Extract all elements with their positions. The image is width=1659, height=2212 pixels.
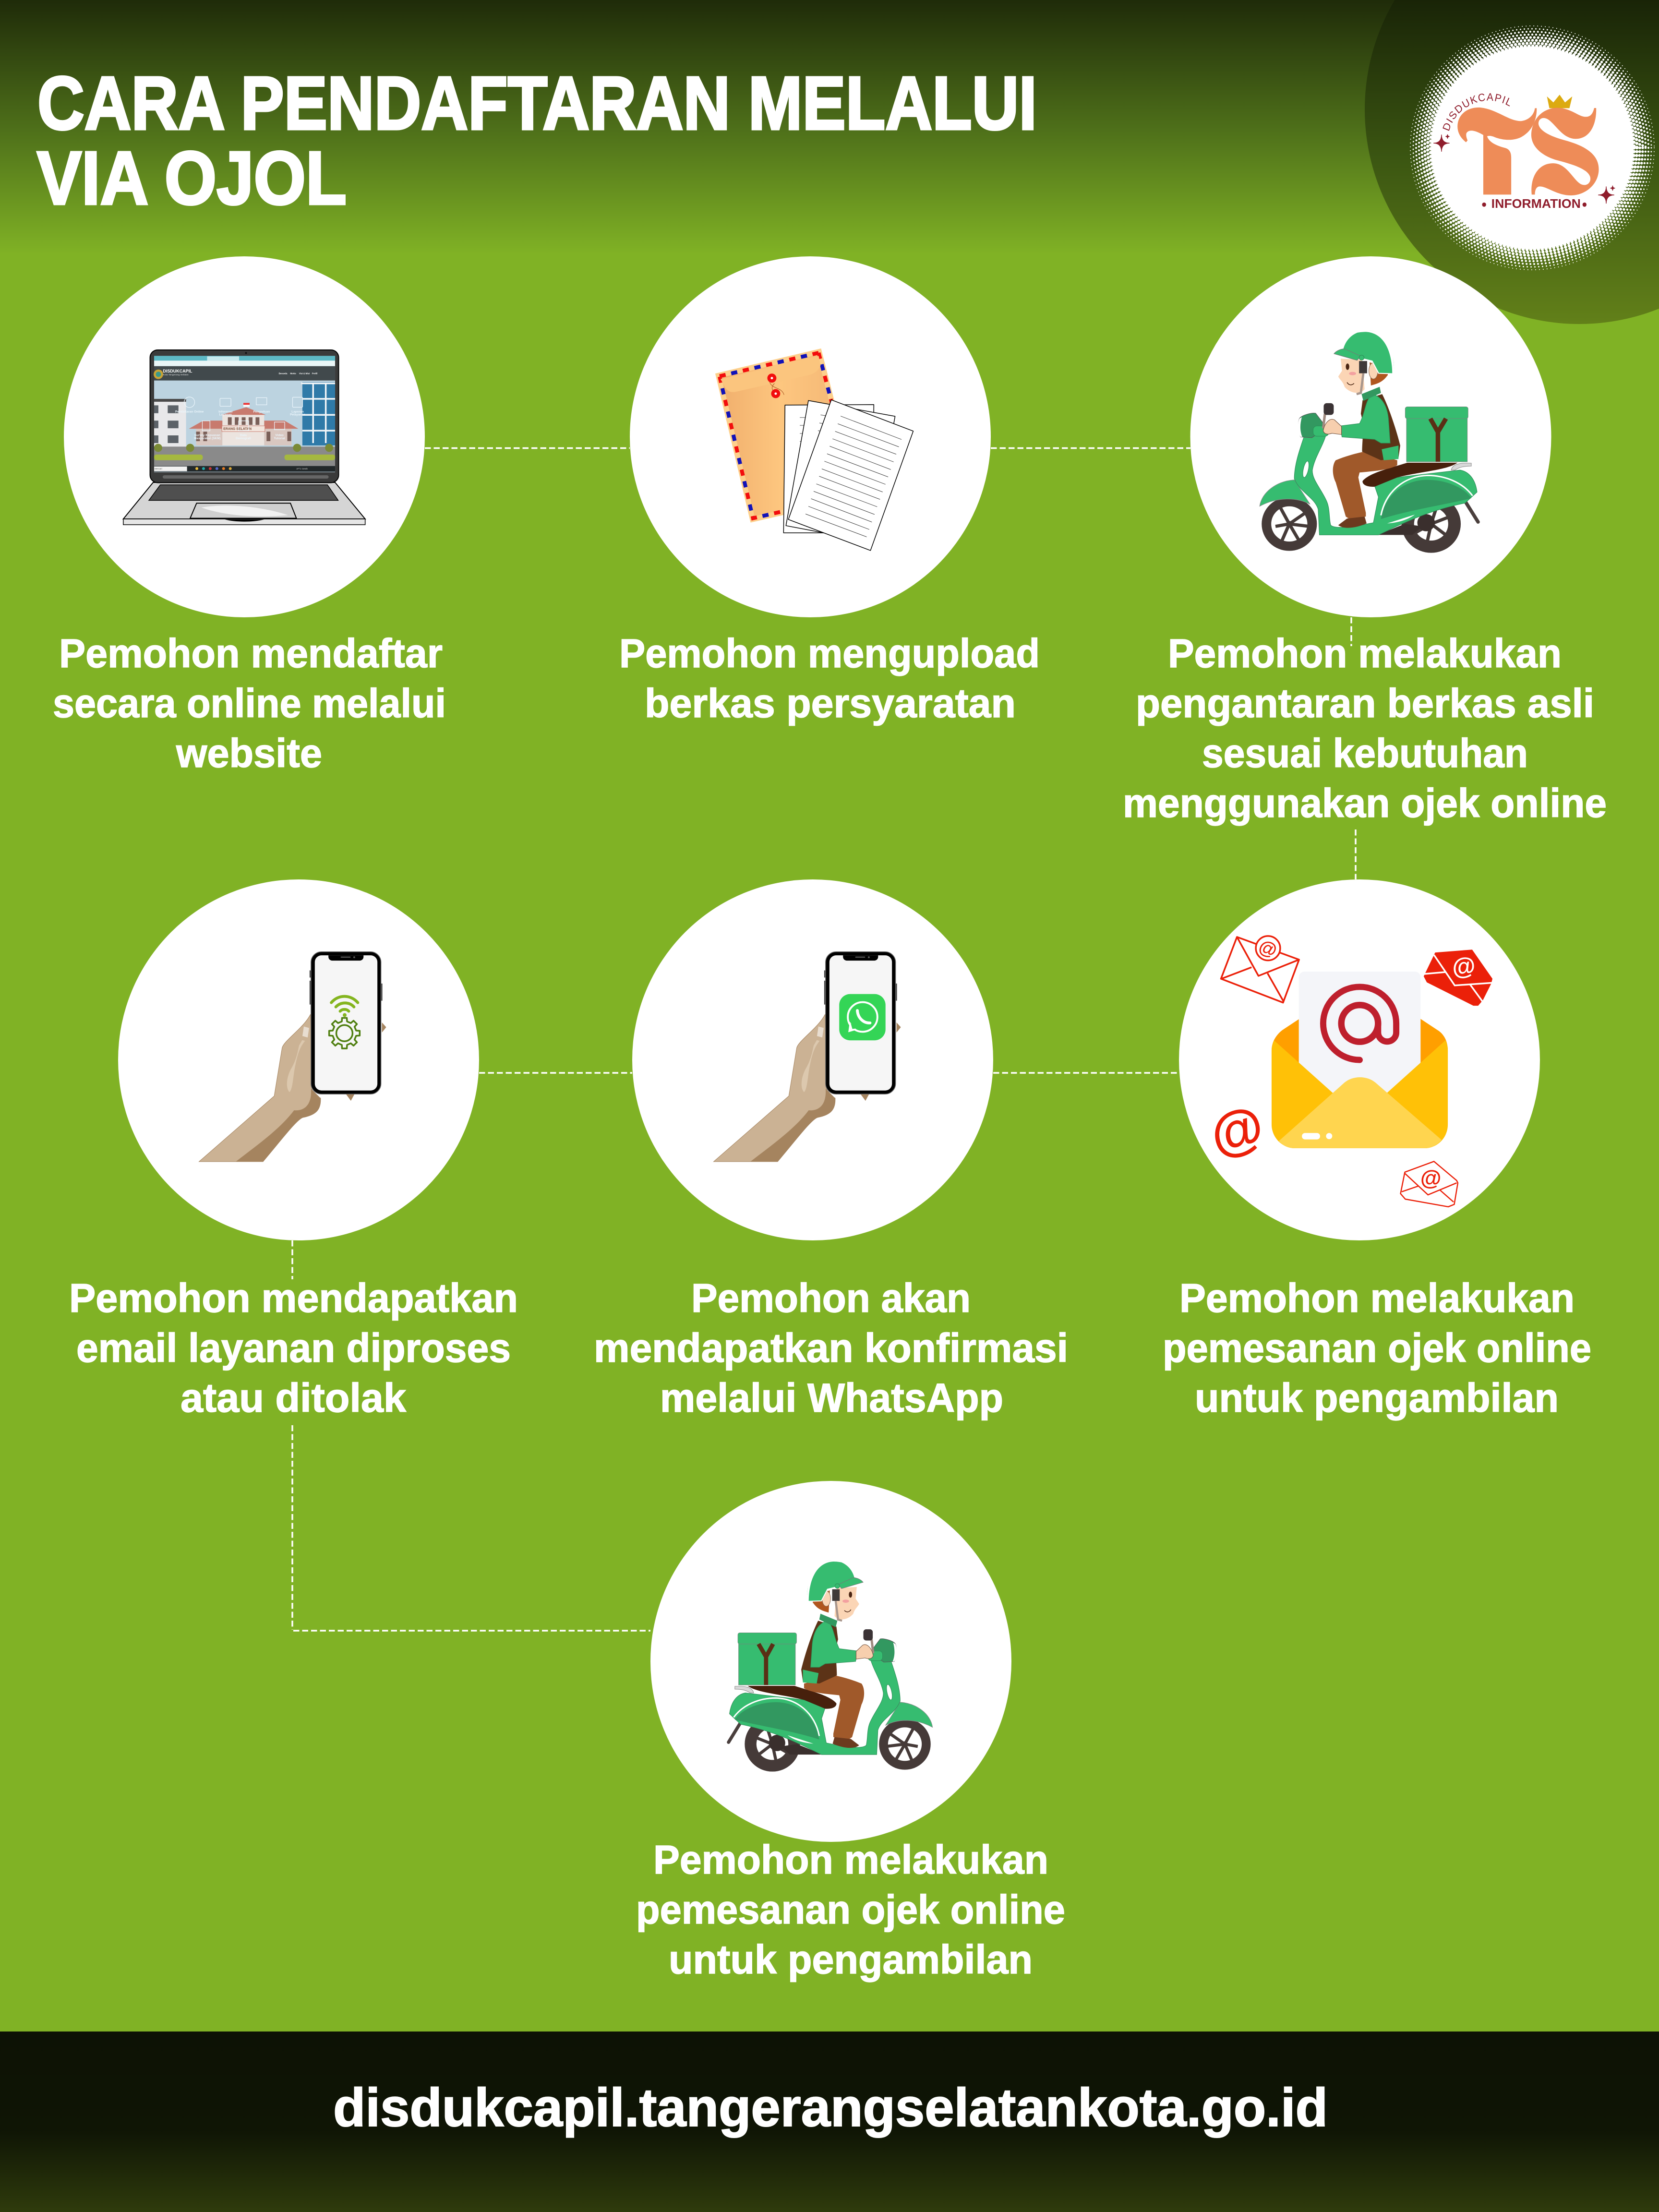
icon: laptop with website: Data xyxy=(240,434,247,437)
panel: step 7 scooter pickup xyxy=(650,1481,1011,1842)
text: step 1: secara online melalui xyxy=(53,681,446,726)
icon: laptop with website: Laporan xyxy=(291,410,304,413)
footer band xyxy=(0,2032,1659,2212)
text: step 7: untuk pengambilan xyxy=(669,1937,1033,1982)
text: step 6: atau ditolak xyxy=(180,1375,406,1420)
text: step 1 xyxy=(53,631,446,776)
text: step 6: Pemohon mendapatkan xyxy=(69,1275,518,1321)
icon: open envelope with at signs: @ xyxy=(1451,952,1477,981)
icon: hand holding phone with WhatsApp xyxy=(714,952,901,1162)
icon: laptop with website: Tutorial xyxy=(274,437,285,440)
text: step 2 xyxy=(619,631,1040,726)
icon: laptop with website: Layanan xyxy=(219,413,232,417)
text: step 3: pengantaran berkas asli xyxy=(1136,681,1594,726)
icon: laptop with website: Informasi xyxy=(218,410,232,413)
corner dark circle xyxy=(1365,0,1659,324)
icon: open envelope with at signs: @ xyxy=(1420,1166,1442,1190)
icon: laptop with website: Visi & Misi xyxy=(299,373,310,375)
title: CARA PENDAFTARAN MELALUI xyxy=(37,61,1037,145)
icon: laptop with website: Mencari xyxy=(155,468,162,470)
text: step 4: untuk pengambilan xyxy=(1195,1375,1559,1420)
text: step 2: berkas persyaratan xyxy=(645,681,1016,726)
text: step 4 xyxy=(1163,1275,1591,1420)
icon: laptop with website: Video xyxy=(275,434,284,437)
icon: laptop with website: Pengaduan xyxy=(253,410,270,413)
panel: step 6 phone with settings xyxy=(118,879,479,1240)
text: step 5: Pemohon akan xyxy=(691,1275,971,1321)
icon: laptop with website: Demografi xyxy=(236,437,251,440)
text: step 6: email layanan diproses xyxy=(76,1325,511,1370)
text: step 4: pemesanan ojek online xyxy=(1163,1325,1591,1370)
panel: step 5 phone with WhatsApp xyxy=(632,879,993,1240)
icon: ojek rider facing left xyxy=(1260,330,1478,553)
icon: laptop with website: Pelayanan xyxy=(290,413,305,417)
text: step 3: menggunakan ojek online xyxy=(1123,781,1607,826)
text: step 7 xyxy=(636,1837,1065,1982)
icon: open envelope with at signs: @ xyxy=(1256,936,1280,961)
connector: dashed flow lines xyxy=(292,448,1356,1631)
icon: open envelope with at signs: @ xyxy=(1204,1094,1270,1166)
panel: step 3 scooter delivery xyxy=(1190,256,1551,617)
icon: envelope and papers xyxy=(719,351,913,551)
icon: laptop with website: Profil xyxy=(312,373,317,375)
text: step 7: Pemohon melakukan xyxy=(653,1837,1048,1882)
icon: laptop with website: Kota Tangerang Selatan xyxy=(163,373,189,376)
title: VIA OJOL xyxy=(37,136,347,220)
icon: laptop with website: 27°C Cerah xyxy=(296,468,308,470)
icon: laptop with website: ERANG SELATAN xyxy=(223,428,252,431)
panel: step 2 documents xyxy=(630,256,991,617)
text: step 1: Pemohon mendaftar xyxy=(59,631,443,676)
icon: ojek rider facing right xyxy=(729,1560,933,1772)
text: step 3: Pemohon melakukan xyxy=(1168,631,1562,676)
text: step 6 xyxy=(69,1275,518,1420)
icon: laptop with website xyxy=(123,350,365,525)
text: step 5 xyxy=(594,1275,1068,1420)
text: step 7: pemesanan ojek online xyxy=(636,1887,1065,1932)
footer website url: disdukcapil.tangerangselatankota.go.id xyxy=(333,2078,1328,2138)
logo: halftone white badge: INFORMATION xyxy=(1491,197,1581,211)
icon: laptop with website: Survey Kepuasan xyxy=(194,434,220,437)
panel: step 4 email xyxy=(1179,879,1540,1240)
logo: halftone white badge: DISDUKCAPIL xyxy=(1443,93,1510,131)
panel: step 1 laptop xyxy=(64,256,425,617)
icon: hand holding phone with gear xyxy=(199,952,386,1162)
icon: laptop with website: Beranda xyxy=(279,373,288,375)
title xyxy=(37,61,1037,220)
icon: laptop with website: DISDUKCAPIL xyxy=(163,369,192,373)
icon: laptop with website: Pendaftaran Online xyxy=(175,410,204,413)
text: step 2: Pemohon mengupload xyxy=(619,631,1040,676)
text: step 4: Pemohon melakukan xyxy=(1179,1275,1575,1321)
icon: laptop with website: Masyarakat (SKM) xyxy=(194,437,221,440)
icon: laptop with website: Motto xyxy=(290,373,296,375)
text: step 3 xyxy=(1123,631,1607,826)
text: step 3: sesuai kebutuhan xyxy=(1202,731,1528,776)
logo: halftone white badge xyxy=(1410,25,1655,270)
icon: open envelope with at signs xyxy=(1204,936,1492,1207)
header gradient band xyxy=(0,0,1659,254)
text: step 1: website xyxy=(176,731,322,776)
text: step 5: melalui WhatsApp xyxy=(660,1375,1003,1420)
text: step 5: mendapatkan konfirmasi xyxy=(594,1325,1068,1370)
